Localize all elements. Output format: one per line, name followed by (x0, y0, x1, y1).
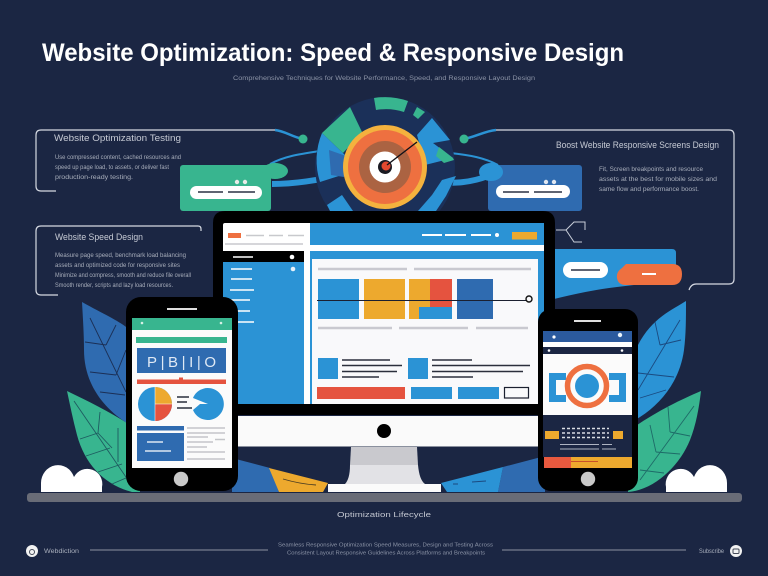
footer text: Seamless Responsive Optimization Speed Measures, Design and Testing Across (278, 542, 493, 548)
card: green (180, 163, 288, 211)
leaf: right green (628, 391, 701, 492)
footer text (278, 542, 493, 556)
red strip (137, 378, 226, 384)
gauge segment: small green block (413, 107, 425, 119)
desk leaf: yellow (269, 468, 328, 492)
gauge needle (387, 142, 417, 165)
tile: orange (364, 279, 405, 319)
desk leaf: right light blue (441, 467, 503, 492)
footer label: right: Subscribe (699, 549, 725, 555)
blue banner: P|B|I|O (147, 354, 216, 371)
phone dark area (543, 415, 632, 457)
panel: responsive design (496, 130, 734, 290)
leaf: left blue (82, 302, 130, 425)
ring graphic (568, 366, 606, 406)
shelf (27, 493, 742, 502)
phone color bar (544, 457, 632, 468)
phone: left (126, 297, 238, 491)
text block: website speed: Minimize and compress, smooth and reduce file overall (55, 273, 191, 279)
footer rule: right (502, 549, 686, 551)
gauge segment: dark blue left (329, 150, 346, 177)
dotted text rows (562, 428, 609, 438)
heading: website speed: Website Speed Design (55, 232, 143, 242)
card: blue (479, 163, 582, 211)
cloud: left (41, 465, 102, 492)
text block: responsive design: same flow and performance boost. (599, 187, 699, 193)
phone lines (560, 444, 616, 449)
phone: right (538, 309, 638, 491)
list item two (408, 358, 530, 379)
pie chart (138, 387, 172, 421)
card: lower right blue (550, 249, 682, 300)
phone top bars (543, 331, 632, 354)
cloud: right (666, 465, 727, 492)
screen main backdrop (310, 251, 544, 404)
tile: mixed (409, 279, 452, 319)
heading: responsive design: Boost Website Responsive Screens Design (556, 140, 719, 150)
blue banner (137, 348, 226, 373)
tile: blue (318, 279, 359, 319)
text block: website speed: Measure page speed, benchmark load balancing (55, 253, 186, 259)
phone screen content (543, 354, 632, 415)
text block: website speed: Smooth render, scripts and lazy load resources. (55, 283, 173, 289)
icon: right badge (730, 545, 742, 557)
grey text lines (187, 428, 225, 459)
heading: website optimization: Website Optimization Testing (54, 133, 181, 143)
phone screen (132, 318, 232, 468)
phone status bar (132, 318, 232, 330)
panel: website speed (36, 226, 201, 295)
caption: Optimization Lifecycle (337, 510, 431, 519)
connector: top left node (275, 130, 308, 144)
text block: website optimization (55, 155, 181, 181)
monitor (213, 211, 555, 446)
slider line (317, 296, 532, 302)
desk leaf: left blue (232, 458, 279, 492)
gauge segment: blue lower left (327, 195, 353, 211)
footer label: left: Webdiction (44, 549, 79, 555)
gauge segment: green wedge (322, 107, 362, 153)
gauge segment: green top arc (374, 97, 408, 112)
text block: website optimization: speed up page load, to assets, or deliver fast (55, 165, 169, 171)
tile: dark blue (457, 279, 493, 319)
text block: responsive design: assets at the best for mobile sizes and (599, 177, 717, 183)
screen background (223, 223, 544, 404)
subtitle: Comprehensive Techniques for Website Performance, Speed, and Responsive Layout Design (233, 76, 535, 82)
leaf: right blue (632, 301, 686, 422)
pie legend lines (177, 397, 192, 408)
brackets (552, 376, 622, 398)
gauge dial (315, 97, 456, 237)
screen content panel (312, 259, 538, 404)
gauge segment: blue lower right (418, 176, 456, 211)
connectors: gauge to cards (270, 151, 498, 184)
orange tags (545, 431, 623, 439)
text block: website optimization: Use compressed content, cached resources and (55, 155, 181, 161)
button row (317, 387, 528, 399)
screen header (225, 223, 544, 245)
green strip (136, 337, 227, 343)
circuit connector (556, 222, 585, 242)
footer rule: left (90, 549, 268, 551)
footer: left (26, 545, 79, 557)
icon: left badge (26, 545, 38, 557)
desk leaf: right dark blue (498, 456, 545, 492)
connector: top right node (460, 130, 496, 144)
title: Website Optimization: Speed & Responsive Design (42, 39, 624, 67)
list item one (318, 358, 402, 379)
screen sidebar (223, 251, 304, 404)
text block: website speed: assets and optimized code for responsive sites (55, 263, 180, 269)
phone button (174, 472, 188, 486)
text block: website speed (55, 253, 191, 289)
monitor stand (328, 447, 441, 492)
pacman chart (193, 388, 224, 420)
leaf: left green (67, 391, 140, 492)
panel: website optimization (36, 130, 275, 191)
gauge segment: green right (436, 147, 454, 163)
info block (137, 426, 184, 461)
monitor body (213, 211, 555, 415)
gauge segment: blue upper right (417, 118, 453, 165)
phone button (581, 472, 595, 486)
phone body (538, 309, 638, 491)
phone speaker (167, 308, 197, 310)
gauge target rings (343, 125, 427, 209)
text block: responsive design (599, 167, 717, 193)
text block: responsive design: Fit, Screen breakpoints and resource (599, 167, 704, 173)
footer text: Consistent Layout Responsive Guidelines Across Platforms and Breakpoints (287, 550, 485, 556)
footer: right (699, 545, 742, 557)
monitor camera (377, 424, 391, 438)
phone body (126, 297, 238, 491)
monitor chin (213, 416, 555, 446)
text block: website optimization: production-ready testing. (55, 175, 133, 181)
phone speaker (574, 320, 601, 322)
gauge segment: blue left (317, 133, 345, 182)
